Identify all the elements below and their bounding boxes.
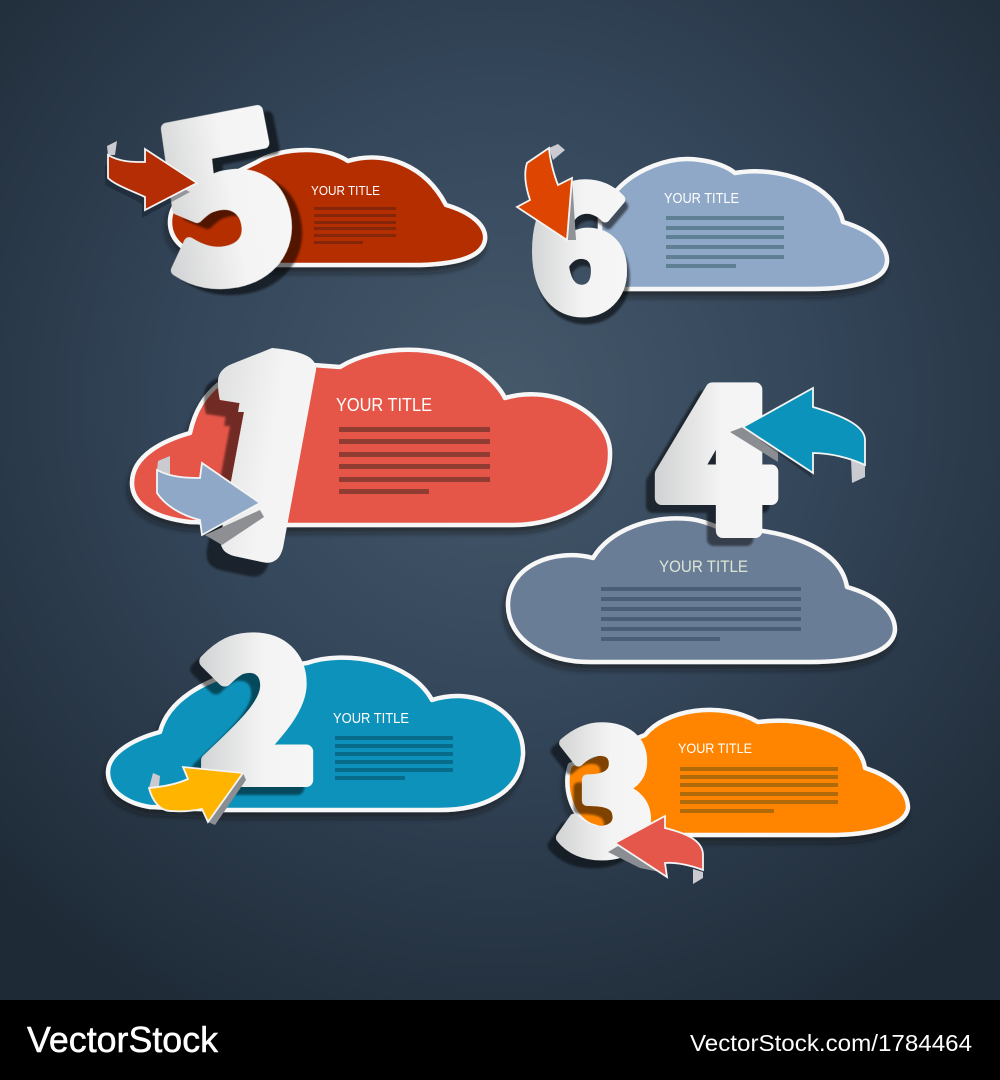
cloud shape 4 [508,518,895,662]
cloud shape 1 [132,350,610,525]
text lines 4 [601,587,801,641]
cloud shape 3 [567,710,908,835]
cloud shape 6 [600,159,887,289]
panel: cloud 3 [557,656,908,902]
arrow 6 [517,144,576,240]
text lines 6 [666,216,784,268]
number 1: 1 [138,214,391,652]
arrow 5 [105,141,197,218]
panel: cloud 2 [108,560,523,835]
footer url text: VectorStock.com/1784464 [690,1030,972,1056]
panel: cloud 6 [517,113,887,359]
footer bar [0,1000,1000,1080]
text lines 2 [335,736,453,780]
number 2: 2 [200,560,316,835]
title 5: YOUR TITLE [311,183,380,198]
number 5: 5 [125,12,320,354]
footer logo text: VectorStock [27,1019,219,1060]
arrow 3 [608,816,703,884]
title 3: YOUR TITLE [678,740,752,756]
title 4: YOUR TITLE [659,558,748,576]
arrow 4 [730,388,865,483]
panel: cloud 1 [126,348,613,578]
number 3: 3 [557,656,655,902]
cloud shape 2 [108,658,523,810]
number 4: 4 [658,306,776,588]
arrow 2 [149,767,246,825]
text lines 1 [339,427,490,494]
arrow 1 [157,456,264,545]
title 6: YOUR TITLE [664,190,739,207]
cloud shape 5 [170,150,485,265]
title 1: YOUR TITLE [336,395,432,415]
title 2: YOUR TITLE [333,711,409,727]
number 6: 6 [529,113,629,359]
text lines 3 [680,767,838,813]
panel: cloud 5 [105,12,485,354]
panel: cloud 4 [508,306,895,662]
text lines 5 [314,207,396,244]
